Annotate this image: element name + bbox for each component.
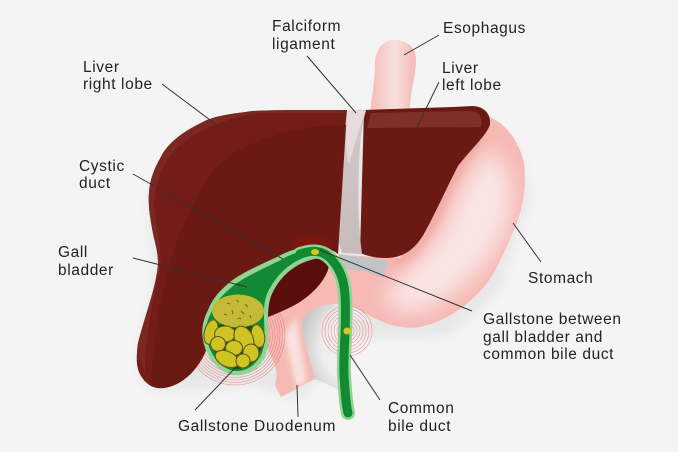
small gallstones (201, 318, 267, 371)
liver right lobe (130, 100, 350, 390)
duodenum tube highlight (284, 318, 306, 388)
leader line: cystic duct (133, 174, 283, 259)
duct lumen (300, 251, 348, 413)
gall bladder and bile duct (201, 247, 348, 413)
label: liver left lobe: Liver (442, 60, 479, 77)
label: stomach: Stomach (528, 270, 593, 287)
label: gallstone between gall bladder and common bile duct: gall bladder and (483, 329, 603, 346)
label: duodenum: Duodenum (254, 418, 336, 435)
falciform ligament (338, 110, 366, 254)
ripples around the duct stone (322, 306, 372, 356)
red glow over the duct (292, 236, 331, 248)
leader line: falciform ligament (307, 56, 356, 113)
leader line: duodenum (297, 385, 298, 417)
label: cystic duct: duct (79, 175, 111, 192)
leader line: liver left lobe (417, 82, 439, 127)
label: liver right lobe: Liver (83, 59, 120, 76)
ligament highlight (346, 110, 366, 163)
leader line: gallstone between (320, 250, 472, 311)
stomach and duodenum (262, 116, 525, 397)
label: falciform ligament: ligament (272, 36, 335, 53)
leader line: gallstone (195, 367, 236, 410)
label: gallstone between gall bladder and common bile duct: Gallstone between (483, 311, 622, 328)
duct outer glow (300, 251, 348, 413)
label: falciform ligament: Falciform (272, 18, 341, 35)
ripples below the gall bladder (185, 285, 285, 385)
label: esophagus: Esophagus (443, 20, 526, 37)
label: gallstone: Gallstone (178, 418, 249, 435)
label: gallstone between gall bladder and common bile duct: common bile duct (483, 346, 614, 363)
hollow grey behind the bile duct (302, 304, 372, 390)
label: gall bladder: bladder (58, 262, 114, 279)
stone in common bile duct (344, 328, 350, 334)
liver left lobe (360, 106, 490, 258)
anatomical infographic (58, 20, 620, 431)
darker pink along liver edge (392, 135, 482, 264)
left lobe highlight (367, 111, 482, 128)
label: liver right lobe: right lobe (83, 76, 153, 93)
soft shadow (139, 110, 530, 400)
lighter outer band (137, 110, 347, 374)
label: common bile duct: Common (388, 400, 454, 417)
esophagus (370, 40, 416, 112)
leader line: esophagus (404, 35, 439, 55)
stone at cystic duct junction (311, 249, 319, 255)
label: common bile duct: bile duct (388, 418, 451, 435)
label: cystic duct: Cystic (79, 158, 125, 175)
dark liver underside (268, 258, 329, 317)
small grey gap under the liver (338, 254, 388, 278)
leader line: common bile duct (350, 355, 380, 400)
large gallstone (212, 294, 264, 328)
darker inner area (150, 125, 350, 390)
gall bladder outer wall (202, 247, 320, 375)
label: gall bladder: Gall (58, 244, 88, 261)
leader line: gall bladder (133, 258, 247, 287)
leader line: stomach (513, 223, 541, 262)
gall bladder lumen (206, 251, 318, 371)
stomach highlight (385, 150, 512, 312)
dark rim of the gall bladder cavity (209, 322, 264, 369)
leader line: liver right lobe (162, 84, 222, 129)
label: liver left lobe: left lobe (442, 77, 502, 94)
